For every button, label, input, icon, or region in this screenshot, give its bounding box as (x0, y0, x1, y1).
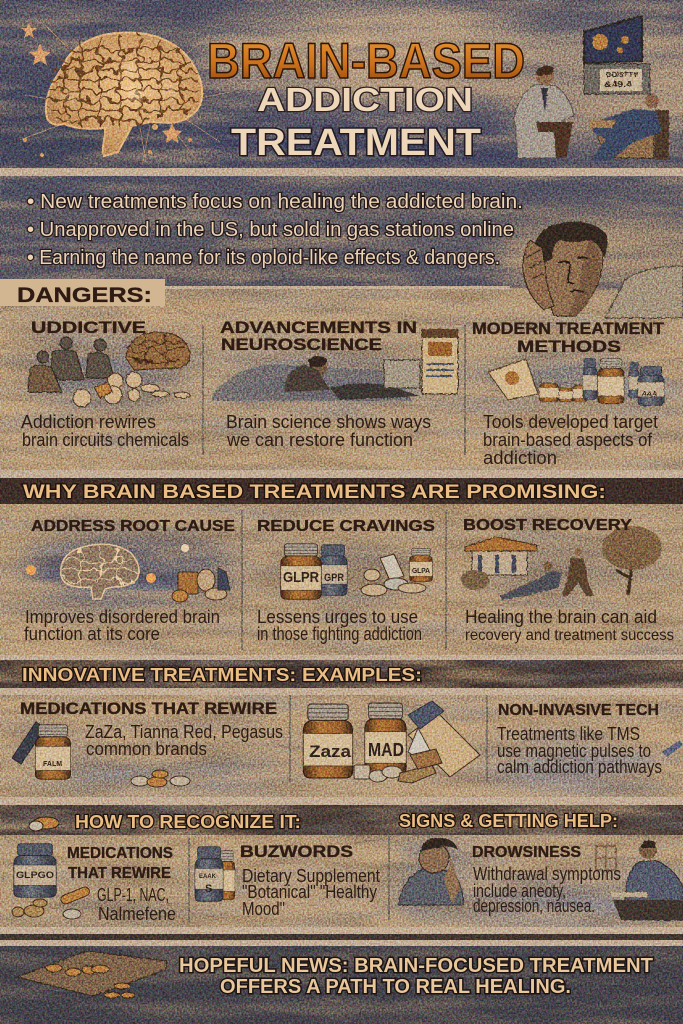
description: Lessens urges to use (257, 607, 418, 627)
description: in those fighting addiction (257, 624, 422, 644)
description (483, 412, 658, 468)
description: addiction (483, 448, 557, 468)
heading: METHODS (517, 337, 621, 356)
description (473, 864, 621, 916)
panel: buzwords text (240, 842, 380, 919)
description: function at its core (24, 624, 160, 644)
icon: GLPGO bottle and pills (12, 844, 91, 919)
dangers tab: DANGERS: (17, 284, 152, 307)
description (242, 866, 380, 919)
description: GLP-1, NAC, (97, 885, 169, 905)
panel: cravings text (257, 518, 435, 644)
wall sign: DOISTTY (606, 70, 638, 79)
icon: pill pile (131, 770, 190, 787)
icon: tilted label and bottle (12, 722, 71, 779)
panel: uddictive illustration (28, 332, 190, 407)
illustration: man holding his head (523, 222, 683, 318)
closing message (179, 955, 653, 998)
description: brain circuits chemicals (22, 430, 189, 450)
heading: REDUCE CRAVINGS (257, 518, 435, 535)
description: Nalmefene (98, 904, 176, 924)
title line: addiction: ADDICTION (257, 81, 473, 118)
icon: buzwords bottles: EAAK (199, 874, 217, 880)
description: Healing the brain can aid (465, 607, 657, 627)
bullet 1: • New treatments focus on healing the addicted brain. (27, 191, 523, 213)
description: use magnetic pulses to (497, 741, 651, 761)
icon: buzwords bottles (195, 847, 235, 901)
icon: framed brain monitor (584, 16, 642, 63)
icon: GLPGO bottle and pills: GLPGO (16, 870, 54, 881)
line 2: OFFERS A PATH TO REAL HEALING. (220, 976, 571, 998)
description (465, 607, 674, 644)
panel: cravings illustration: GPR (324, 572, 344, 584)
heading (67, 845, 173, 882)
section heading: innovative treatments: INNOVATIVE TREATMENTS: EXAMPLES: (22, 665, 422, 685)
line 1: HOPEFUL NEWS: BRAIN-FOCUSED TREATMENT (179, 955, 653, 977)
intro bullet list (27, 191, 523, 269)
section heading: why promising: WHY BRAIN BASED TREATMENTS ARE PROMISING: (23, 482, 606, 503)
heading: BOOST RECOVERY (463, 517, 632, 534)
heading: DROWSINESS (472, 844, 581, 861)
heading: ADDRESS ROOT CAUSE (31, 518, 235, 535)
description (257, 607, 422, 644)
icon: tilted label and bottle: FALM (43, 761, 62, 768)
panel: cravings illustration: GLPA (412, 568, 430, 575)
patient on couch (588, 94, 669, 161)
heading: NON-INVASIVE TECH (498, 702, 659, 719)
description: we can restore function (226, 430, 413, 450)
description: Withdrawal symptoms (473, 864, 621, 884)
heading: THAT REWIRE (68, 865, 171, 882)
panel: advancements text (220, 318, 431, 450)
illustration: doctor with clipboard and window (596, 840, 683, 920)
description (21, 412, 189, 450)
description (24, 607, 220, 644)
icon: capsules (29, 817, 59, 831)
description: Tools developed target (483, 412, 658, 432)
description (85, 722, 283, 759)
heading: how to recognize it: HOW TO RECOGNIZE IT: (75, 812, 301, 832)
description (97, 885, 176, 924)
panel: cravings illustration: GLPR (283, 569, 319, 586)
panel: recovery illustration (461, 526, 662, 600)
description (497, 724, 662, 777)
heading (220, 318, 417, 354)
description: Mood" (242, 899, 285, 919)
doctor (514, 66, 574, 158)
wall sign: &49.4 (604, 80, 633, 89)
bullet 3: • Earning the name for its oploid-like effects & dangers. (27, 247, 500, 269)
panel: uddictive text (21, 318, 189, 450)
description (226, 412, 431, 450)
heading: UDDICTIVE (31, 318, 146, 337)
heading: MODERN TREATMENT (472, 319, 665, 338)
heading (472, 319, 665, 356)
panel: non-invasive tech text (497, 702, 662, 777)
illustration: Zaza and MAD bottles: MAD (368, 740, 404, 760)
illustration: board with pills (17, 951, 167, 998)
panel: root cause text (24, 518, 235, 644)
description: include aneoty, (473, 881, 566, 901)
description: Addiction rewires (21, 412, 156, 432)
panel: modern treatment text (472, 319, 665, 468)
panel: modern treatment illustration (488, 359, 664, 405)
description: brain-based aspects of (483, 430, 653, 450)
description: "Botanical" "Healthy (242, 882, 377, 902)
panel: cravings illustration (281, 544, 432, 599)
description: depression, nausea. (473, 896, 595, 916)
title line: brain-based: BRAIN-BASED (207, 33, 525, 89)
heading: MEDICATIONS (67, 845, 173, 862)
description: Dietary Supplement (242, 866, 380, 886)
heading: BUZWORDS (240, 842, 353, 861)
icon: buzwords bottles: S (205, 883, 212, 895)
title line: treatment: TREATMENT (231, 122, 481, 164)
illustration: tired man (398, 838, 464, 905)
section rails (0, 168, 683, 946)
description: Brain science shows ways (226, 412, 431, 432)
panel: drowsiness text (472, 844, 621, 916)
title (207, 33, 525, 164)
panel: recovery text (463, 517, 674, 644)
wall sign (584, 64, 650, 94)
dangers tab (0, 279, 165, 307)
heading: ADVANCEMENTS IN (220, 318, 417, 337)
description: ZaZa, Tianna Red, Pegasus (85, 722, 283, 742)
heading: MEDICATIONS THAT REWIRE (20, 699, 277, 718)
panel: modern treatment illustration: AAA (642, 391, 657, 398)
description: common brands (86, 739, 207, 759)
illustration: doctor and patient (514, 16, 669, 161)
icon: pen edge (662, 740, 683, 757)
illustration: Zaza and MAD bottles (303, 701, 480, 783)
description: Treatments like TMS (497, 724, 640, 744)
bullet 2: • Unapproved in the US, but sold in gas stations online (27, 219, 514, 241)
panel: neuroscience illustration (212, 329, 458, 401)
heading: NEUROSCIENCE (221, 335, 382, 354)
icon: glowing brain (20, 22, 230, 165)
heading: signs and getting help: SIGNS & GETTING HELP: (399, 811, 618, 831)
section band headings: recognize and signs (75, 811, 618, 832)
panel: medications (recognize) text (67, 845, 176, 924)
panel: medications that rewire text (20, 699, 283, 759)
panel: root cause illustration (26, 544, 230, 602)
illustration: Zaza and MAD bottles: Zaza (309, 742, 352, 761)
description: Improves disordered brain (25, 607, 220, 627)
